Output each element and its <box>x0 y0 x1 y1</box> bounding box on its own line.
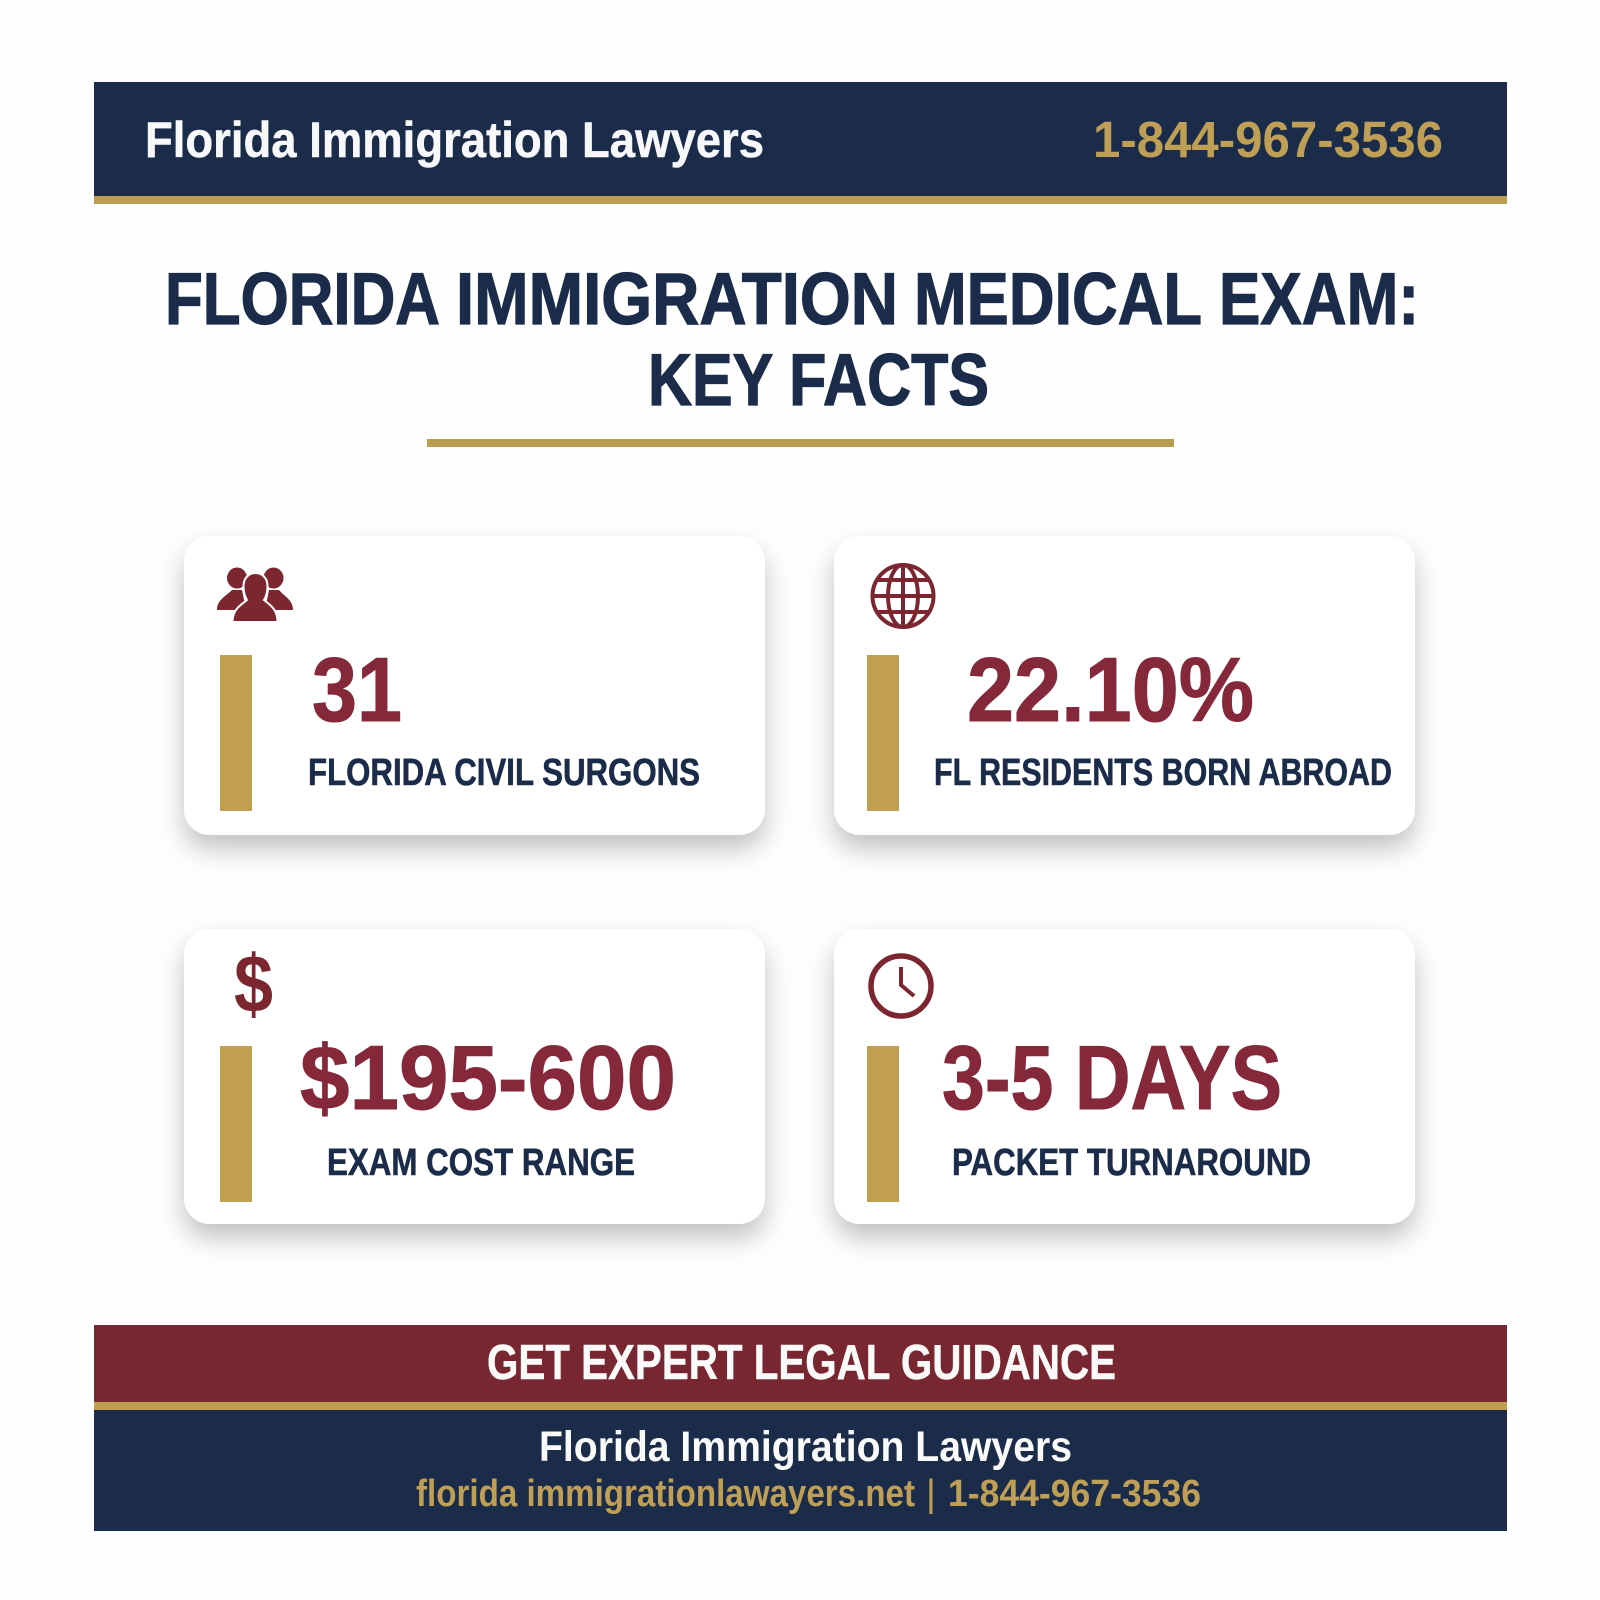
footer website and phone: | <box>926 1473 936 1515</box>
panel: exam cost range <box>184 929 765 1224</box>
stat label: PACKET TURNAROUND <box>952 1142 1311 1184</box>
panel: residents born abroad <box>834 536 1415 835</box>
header firm name: Florida Immigration Lawyers <box>145 112 764 168</box>
title: KEY FACTS <box>648 340 989 421</box>
call to action text: GET EXPERT LEGAL GUIDANCE <box>487 1336 1116 1390</box>
stat value: 31 <box>312 640 402 741</box>
icon: people <box>217 568 293 622</box>
stat value: $195-600 <box>300 1028 676 1129</box>
stat label: EXAM COST RANGE <box>327 1142 635 1184</box>
stat label: FL RESIDENTS BORN ABROAD <box>934 752 1392 794</box>
title: EXAM: <box>1219 259 1419 340</box>
title underline <box>427 439 1174 447</box>
panel: packet turnaround <box>834 929 1415 1224</box>
stat label: FLORIDA CIVIL SURGONS <box>308 752 700 794</box>
icon: dollar sign: $ <box>234 939 273 1030</box>
panel: Florida civil surgeons <box>184 536 765 835</box>
footer contact block <box>94 1410 1507 1531</box>
gold accent bar <box>220 655 252 811</box>
header banner <box>94 82 1507 204</box>
title <box>165 259 1419 421</box>
header phone number: 1-844-967-3536 <box>1093 111 1443 168</box>
footer call to action banner <box>94 1325 1507 1402</box>
title: MEDICAL <box>914 259 1202 340</box>
footer gold divider <box>94 1402 1507 1410</box>
gold accent bar <box>867 655 899 811</box>
footer website and phone: florida immigrationlawayers.net <box>416 1473 915 1515</box>
stat value: 22.10% <box>967 640 1254 741</box>
icon: clock <box>871 956 931 1016</box>
icon: globe <box>872 565 934 627</box>
footer website and phone: 1-844-967-3536 <box>948 1473 1201 1515</box>
gold accent bar <box>220 1046 252 1202</box>
stat value: 3-5 DAYS <box>942 1028 1282 1129</box>
footer firm name: Florida Immigration Lawyers <box>539 1423 1072 1471</box>
gold accent bar <box>867 1046 899 1202</box>
title: IMMIGRATION <box>456 259 898 340</box>
title: FLORIDA <box>165 259 440 340</box>
